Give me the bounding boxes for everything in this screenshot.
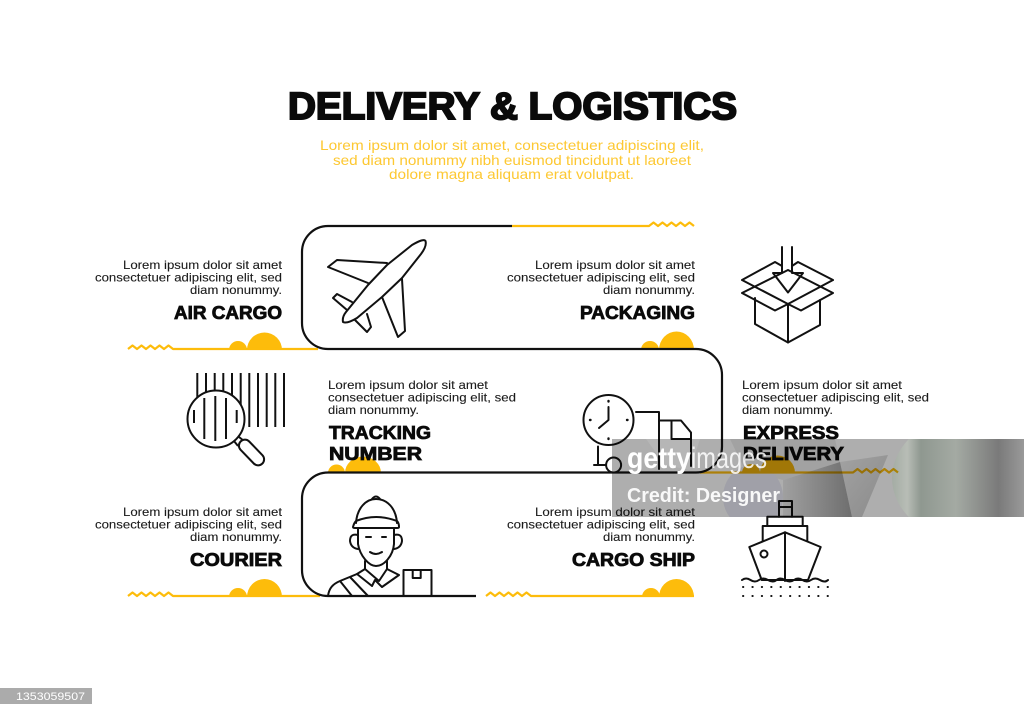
- panel: tracking number text: TRACKING: [329, 423, 431, 443]
- panel: courier text: COURIER: [190, 550, 282, 570]
- panel: packaging text: diam nonummy.: [603, 283, 695, 297]
- watermark banner: [612, 439, 1024, 517]
- decorative yellow blobs: [229, 332, 795, 597]
- panel: air cargo text: diam nonummy.: [190, 283, 282, 297]
- panel: tracking number text: diam nonummy.: [328, 403, 419, 417]
- icon: cargo ship: [742, 501, 828, 596]
- image id tag: 1353059507: [16, 691, 85, 703]
- watermark banner: getty: [627, 442, 691, 475]
- subtitle: dolore magna aliquam erat volutpat.: [389, 166, 634, 182]
- icon: airplane: [328, 240, 426, 337]
- watermark banner: Credit: Designer: [627, 485, 780, 507]
- panel: air cargo text: AIR CARGO: [174, 303, 282, 323]
- panel: courier text: [95, 505, 283, 570]
- panel: packaging text: consectetuer adipiscing elit, sed: [507, 270, 695, 284]
- panel: express delivery text: Lorem ipsum dolor sit amet: [742, 378, 903, 392]
- panel: tracking number text: Lorem ipsum dolor sit amet: [328, 378, 489, 392]
- image id tag: [0, 688, 92, 704]
- panel: courier text: consectetuer adipiscing elit, sed: [95, 518, 282, 532]
- watermark banner: images: [691, 442, 767, 475]
- icon: barcode under magnifier: [188, 373, 284, 468]
- panel: cargo ship text: diam nonummy.: [603, 530, 695, 544]
- panel: packaging text: PACKAGING: [580, 303, 695, 323]
- panel: air cargo text: consectetuer adipiscing elit, sed: [95, 270, 282, 284]
- black serpentine timeline: [302, 226, 722, 596]
- panel: tracking number text: NUMBER: [329, 444, 422, 464]
- icon: clock and delivery truck: [584, 395, 691, 472]
- panel: packaging text: Lorem ipsum dolor sit amet: [535, 258, 696, 272]
- panel: air cargo text: Lorem ipsum dolor sit amet: [123, 258, 283, 272]
- subtitle: Lorem ipsum dolor sit amet, consectetuer adipiscing elit,: [320, 137, 704, 153]
- panel: tracking number text: [328, 378, 516, 464]
- panel: cargo ship text: consectetuer adipiscing elit, sed: [507, 518, 695, 532]
- subtitle: [320, 137, 704, 182]
- title: DELIVERY & LOGISTICS: [288, 86, 737, 128]
- panel: express delivery text: EXPRESS: [743, 423, 839, 443]
- yellow connector lines: [128, 222, 898, 596]
- panel: packaging text: [507, 258, 696, 323]
- subtitle: sed diam nonummy nibh euismod tincidunt ut laoreet: [333, 152, 691, 168]
- icon: package box with arrow: [742, 247, 833, 342]
- panel: cargo ship text: [507, 505, 696, 570]
- panel: express delivery text: consectetuer adipiscing elit, sed: [742, 390, 929, 404]
- panel: express delivery text: [742, 378, 929, 464]
- panel: cargo ship text: CARGO SHIP: [572, 550, 695, 570]
- panel: cargo ship text: Lorem ipsum dolor sit amet: [535, 505, 696, 519]
- icon: courier with parcel: [328, 496, 432, 596]
- panel: express delivery text: DELIVERY: [743, 444, 844, 464]
- panel: express delivery text: diam nonummy.: [742, 403, 833, 417]
- panel: air cargo text: [95, 258, 283, 323]
- panel: courier text: diam nonummy.: [190, 530, 282, 544]
- panel: courier text: Lorem ipsum dolor sit amet: [123, 505, 283, 519]
- panel: tracking number text: consectetuer adipiscing elit, sed: [328, 390, 516, 404]
